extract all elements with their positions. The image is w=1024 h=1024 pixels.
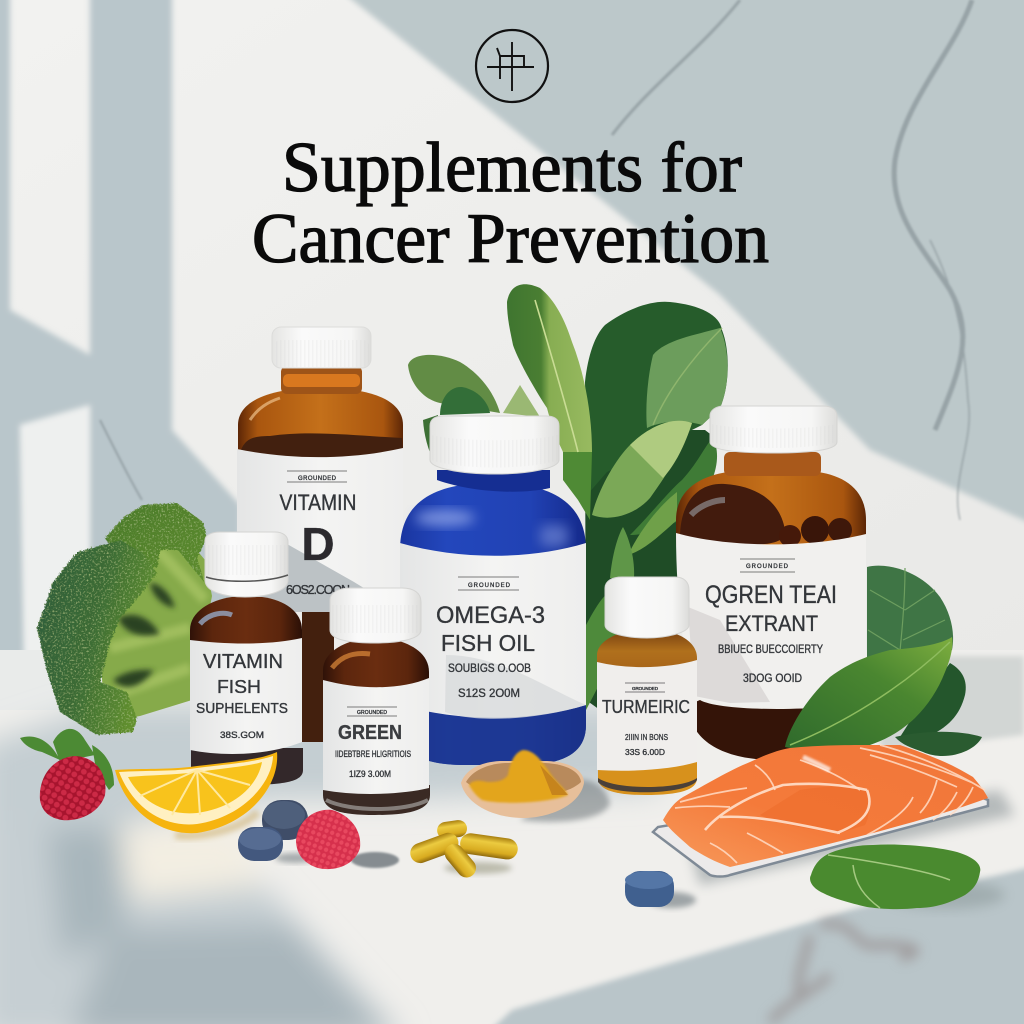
green label: IIDEBTBRE HLIGRITIOIS <box>335 749 411 759</box>
turmeric label: GROUNDED <box>632 686 659 691</box>
blue tablet <box>625 871 696 908</box>
vitamin fish glass <box>190 597 303 785</box>
fish oil capsules <box>407 819 519 881</box>
front leaf beside salmon <box>785 637 952 750</box>
dark blue tablets <box>238 800 315 863</box>
green glass <box>323 640 430 815</box>
omega cap <box>430 416 559 474</box>
green tea cap <box>710 406 837 453</box>
vitamin fish label <box>190 638 302 754</box>
vitamin fish label: FISH <box>217 677 261 697</box>
bottle D label: D <box>301 518 335 570</box>
broccoli stems <box>100 530 212 722</box>
marble veins <box>100 0 972 520</box>
turmeric label <box>597 660 697 771</box>
green tea label: EXTRANT <box>725 611 818 636</box>
green tea label: BBIUEC BUECCOIERTY <box>718 644 823 656</box>
leaves at right of bottles <box>867 566 982 756</box>
green cap <box>330 588 421 643</box>
vitamin fish label: 38S.GOM <box>220 730 264 741</box>
bottle: omega-3 fish oil <box>400 416 586 765</box>
title: Supplements for <box>282 129 742 207</box>
omega label: S12S 2O0M <box>458 686 520 700</box>
vitamin fish label: VITAMIN <box>203 651 283 673</box>
right capsule <box>459 832 519 861</box>
front capsule <box>441 840 480 881</box>
tray <box>653 790 988 876</box>
bottle D glass <box>238 366 403 742</box>
omega label <box>400 543 586 719</box>
turmeric bowl <box>461 750 610 822</box>
raspberry front <box>296 810 399 869</box>
back capsule <box>436 819 468 840</box>
green tea label: 3DOG OOID <box>743 673 802 685</box>
bottle: green <box>323 588 430 815</box>
green label <box>323 678 429 794</box>
bottle: turmeric <box>597 577 697 795</box>
turmeric label: 33S 6.00D <box>625 747 665 757</box>
turmeric label: TURMEIRIC <box>602 697 690 717</box>
green tea label <box>676 533 866 707</box>
shadow of tray <box>690 790 1015 885</box>
turmeric glass <box>597 632 697 795</box>
bottle: vitamin D <box>237 327 403 742</box>
omega label: GROUNDED <box>468 583 511 589</box>
title <box>252 129 769 278</box>
turmeric label: 2IIIN IN BONS <box>625 732 668 742</box>
raspberry left with leaves <box>20 729 114 820</box>
green label: 1IZ9 3.00M <box>349 769 391 779</box>
lemon slice <box>115 752 277 836</box>
green label: GROUNDED <box>357 710 387 716</box>
logo emblem <box>476 30 548 102</box>
table surface with cast light <box>0 650 1024 1024</box>
broccoli crowns <box>105 503 207 582</box>
green tea label: QGREN TEAI <box>705 581 837 609</box>
background: marble wall with window light <box>0 0 1024 660</box>
salmon fillet on tray <box>653 745 1015 885</box>
broccoli <box>37 503 212 735</box>
bottle D label: 6OS2.COON <box>286 583 350 597</box>
bottle D label: GROUNDED <box>298 476 337 482</box>
bottle: green tea extract <box>676 406 866 760</box>
bottle D label <box>237 448 403 612</box>
omega label: FISH OIL <box>441 630 535 656</box>
fillet <box>663 745 988 867</box>
vitamin fish cap <box>205 532 288 597</box>
upper tablet <box>262 800 308 840</box>
omega label: OMEGA-3 <box>436 602 545 629</box>
omega body <box>400 470 586 765</box>
vitamin fish label: SUPHELENTS <box>196 701 288 717</box>
lower tablet <box>238 827 283 861</box>
title: Cancer Prevention <box>252 200 769 278</box>
green tea glass <box>676 452 866 760</box>
green leaves behind bottles <box>408 284 728 710</box>
omega label: SOUBIGS O.OOB <box>448 663 531 675</box>
bottle: vitamin fish supplements <box>190 532 303 785</box>
bottle D cap <box>272 327 371 368</box>
turmeric cap <box>605 577 689 638</box>
green tea label: GROUNDED <box>746 564 789 570</box>
bottle D label: VITAMIN <box>280 490 356 515</box>
spinach leaf on table <box>810 845 1005 909</box>
green label: GREEN <box>338 721 402 744</box>
left capsule <box>407 830 461 866</box>
